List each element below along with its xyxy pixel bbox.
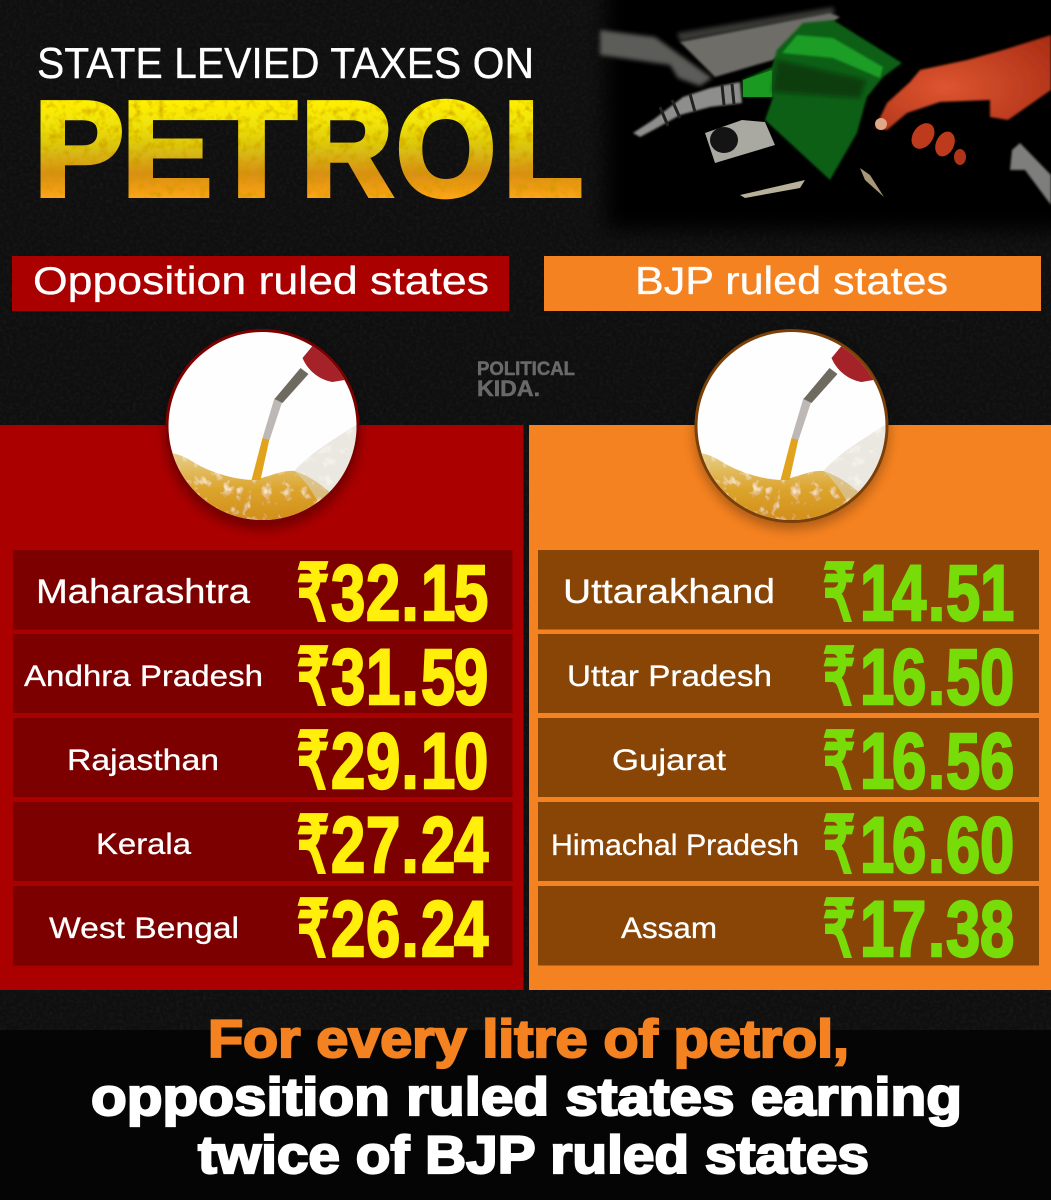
car panel bbox=[680, 13, 840, 77]
row: Andhra Pradesh: Andhra Pradesh bbox=[24, 660, 263, 693]
row: Assam: ₹ bbox=[823, 885, 855, 973]
clip detail bbox=[860, 168, 884, 197]
row: Rajasthan: ₹ bbox=[297, 717, 329, 805]
row: Assam: Assam bbox=[621, 912, 717, 945]
row: Rajasthan bbox=[13, 717, 512, 806]
metal lever bbox=[1010, 143, 1051, 205]
nozzle photo bbox=[600, 0, 1051, 230]
title bbox=[34, 39, 583, 224]
finger 3 bbox=[954, 149, 966, 165]
row: Himachal Pradesh: Himachal Pradesh bbox=[551, 829, 799, 862]
row: Andhra Pradesh bbox=[13, 633, 512, 722]
header: opposition: Opposition ruled states bbox=[33, 260, 489, 303]
headline word bbox=[34, 74, 583, 224]
headline word: T bbox=[206, 74, 296, 224]
row: Uttarakhand bbox=[538, 549, 1039, 638]
footer line 1: For every litre of petrol, bbox=[208, 1010, 849, 1069]
row: Maharashtra: Maharashtra bbox=[36, 573, 250, 611]
row: West Bengal bbox=[13, 885, 512, 974]
row: Himachal Pradesh: ₹ bbox=[823, 801, 855, 889]
row: West Bengal: ₹ bbox=[297, 885, 329, 973]
panel: BJP ruled states bbox=[529, 329, 1051, 990]
grey car body bbox=[600, 30, 712, 86]
metal spout bbox=[633, 82, 742, 137]
row: Maharashtra: 32.15 bbox=[331, 550, 488, 638]
headline word: O bbox=[396, 74, 496, 224]
row: Maharashtra bbox=[13, 549, 512, 638]
headline word: P bbox=[34, 74, 124, 224]
circle icon: fuel pour bbox=[162, 329, 362, 529]
row: Kerala: Kerala bbox=[96, 828, 191, 861]
watermark: POLITICAL bbox=[477, 359, 575, 380]
header: opposition bbox=[12, 256, 509, 311]
dark car top bbox=[677, 7, 835, 42]
row: Uttar Pradesh: ₹ bbox=[823, 633, 855, 721]
row: Gujarat bbox=[538, 717, 1039, 806]
fingertip bbox=[875, 118, 887, 130]
row: Kerala bbox=[13, 801, 512, 890]
hand bbox=[875, 35, 1051, 130]
footer line 2: opposition ruled states earning bbox=[91, 1068, 962, 1127]
sticker shadow bbox=[710, 127, 738, 153]
finger 1 bbox=[907, 119, 939, 153]
row: Himachal Pradesh bbox=[538, 801, 1039, 890]
trigger detail bbox=[740, 180, 805, 198]
green collar bbox=[743, 70, 772, 97]
label sticker bbox=[705, 120, 775, 163]
row: Maharashtra: ₹ bbox=[297, 549, 329, 637]
green nozzle bbox=[742, 20, 902, 180]
headline word: L bbox=[503, 74, 583, 224]
row: Kerala: 27.24 bbox=[331, 802, 489, 890]
row: Gujarat: Gujarat bbox=[612, 744, 727, 777]
watermark: KIDA. bbox=[477, 376, 540, 401]
row: West Bengal: 26.24 bbox=[331, 886, 489, 974]
row: Gujarat: ₹ bbox=[823, 717, 855, 805]
headline word: E bbox=[122, 74, 212, 224]
footer statement bbox=[0, 1010, 1051, 1200]
row: Andhra Pradesh: 31.59 bbox=[331, 634, 488, 722]
footer line 3: twice of BJP ruled states bbox=[198, 1126, 869, 1185]
finger 2 bbox=[931, 128, 959, 160]
row: Uttarakhand: Uttarakhand bbox=[563, 573, 775, 611]
header: BJP: BJP ruled states bbox=[635, 260, 948, 303]
headline word: R bbox=[301, 74, 393, 224]
row: West Bengal: West Bengal bbox=[49, 912, 239, 945]
row: Assam: 17.38 bbox=[860, 886, 1014, 974]
header: BJP bbox=[544, 256, 1041, 311]
row: Uttar Pradesh: Uttar Pradesh bbox=[567, 660, 772, 693]
row: Rajasthan: 29.10 bbox=[331, 718, 488, 806]
row: Rajasthan: Rajasthan bbox=[67, 744, 219, 777]
title line: STATE LEVIED TAXES ON bbox=[37, 39, 534, 88]
panel: opposition ruled states bbox=[0, 329, 524, 990]
row: Uttar Pradesh: 16.50 bbox=[860, 634, 1014, 722]
spout rings bbox=[660, 84, 734, 126]
row: Gujarat: 16.56 bbox=[860, 718, 1014, 806]
row: Uttarakhand: 14.51 bbox=[860, 550, 1014, 638]
row: Andhra Pradesh: ₹ bbox=[297, 633, 329, 721]
row: Himachal Pradesh: 16.60 bbox=[860, 802, 1014, 890]
green highlight bbox=[782, 35, 883, 78]
row: Uttar Pradesh bbox=[538, 633, 1039, 722]
watermark bbox=[477, 359, 575, 401]
row: Assam bbox=[538, 885, 1039, 974]
green shadow bbox=[772, 60, 866, 98]
circle icon: fuel pour bbox=[692, 329, 892, 529]
row: Uttarakhand: ₹ bbox=[823, 549, 855, 637]
row: Kerala: ₹ bbox=[297, 801, 329, 889]
